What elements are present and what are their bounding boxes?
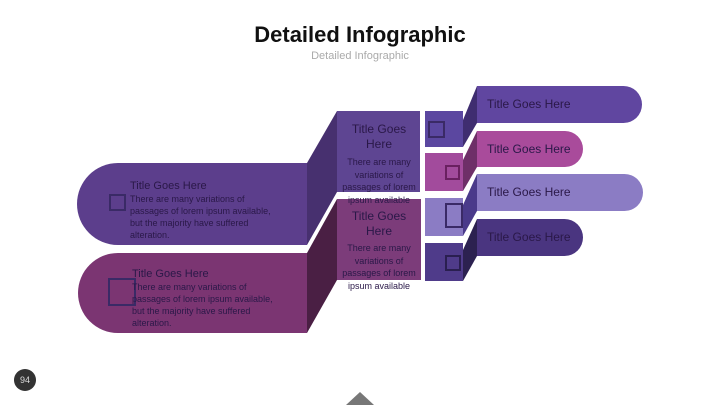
text block: Title Goes Here <box>132 268 209 280</box>
right bar 1: Title Goes Here <box>487 97 571 111</box>
square 3 <box>425 198 463 236</box>
text block: Title Goes Here <box>130 180 207 192</box>
title: Detailed Infographic <box>254 22 466 47</box>
right bar 3: Title Goes Here <box>487 185 571 199</box>
icon: square <box>108 278 136 306</box>
panel: center block 1 <box>337 111 420 192</box>
text: center 1 <box>342 122 416 205</box>
text block: There are many variations of passages of lorem ipsum available, but the majority have suffered alteration. <box>130 194 271 240</box>
right bar 2 <box>477 131 583 167</box>
icon: bottom triangle <box>346 392 374 405</box>
text: center 1: Title Goes Here <box>352 122 406 151</box>
text: center 2: Title Goes Here <box>352 209 406 238</box>
panel: center block 2 <box>337 199 421 280</box>
text: center 2: There are many variations of passages of lorem ipsum available <box>342 243 416 290</box>
square 2 <box>425 153 463 191</box>
right side faces <box>463 86 477 281</box>
small squares column <box>425 111 463 281</box>
page number: 94 <box>20 375 30 385</box>
right bar 2: Title Goes Here <box>487 142 571 156</box>
text block: There are many variations of passages of lorem ipsum available, but the majority have suffered alteration. <box>132 282 273 328</box>
icon: square <box>109 194 126 211</box>
panel: left bar 2 <box>78 253 307 333</box>
right bar 4: Title Goes Here <box>487 230 571 244</box>
page number <box>14 369 36 391</box>
right bar 1 <box>477 86 642 123</box>
square 4 <box>425 243 463 281</box>
panel: left bar 1 <box>77 163 307 245</box>
text: center 1: There are many variations of passages of lorem ipsum available <box>342 157 416 204</box>
subtitle: Detailed Infographic <box>311 50 409 62</box>
square 1 <box>425 111 463 147</box>
right bar 4 <box>477 219 583 256</box>
text: center 2 <box>342 209 416 291</box>
side faces left <box>307 111 337 333</box>
right bar 3 <box>477 174 643 211</box>
